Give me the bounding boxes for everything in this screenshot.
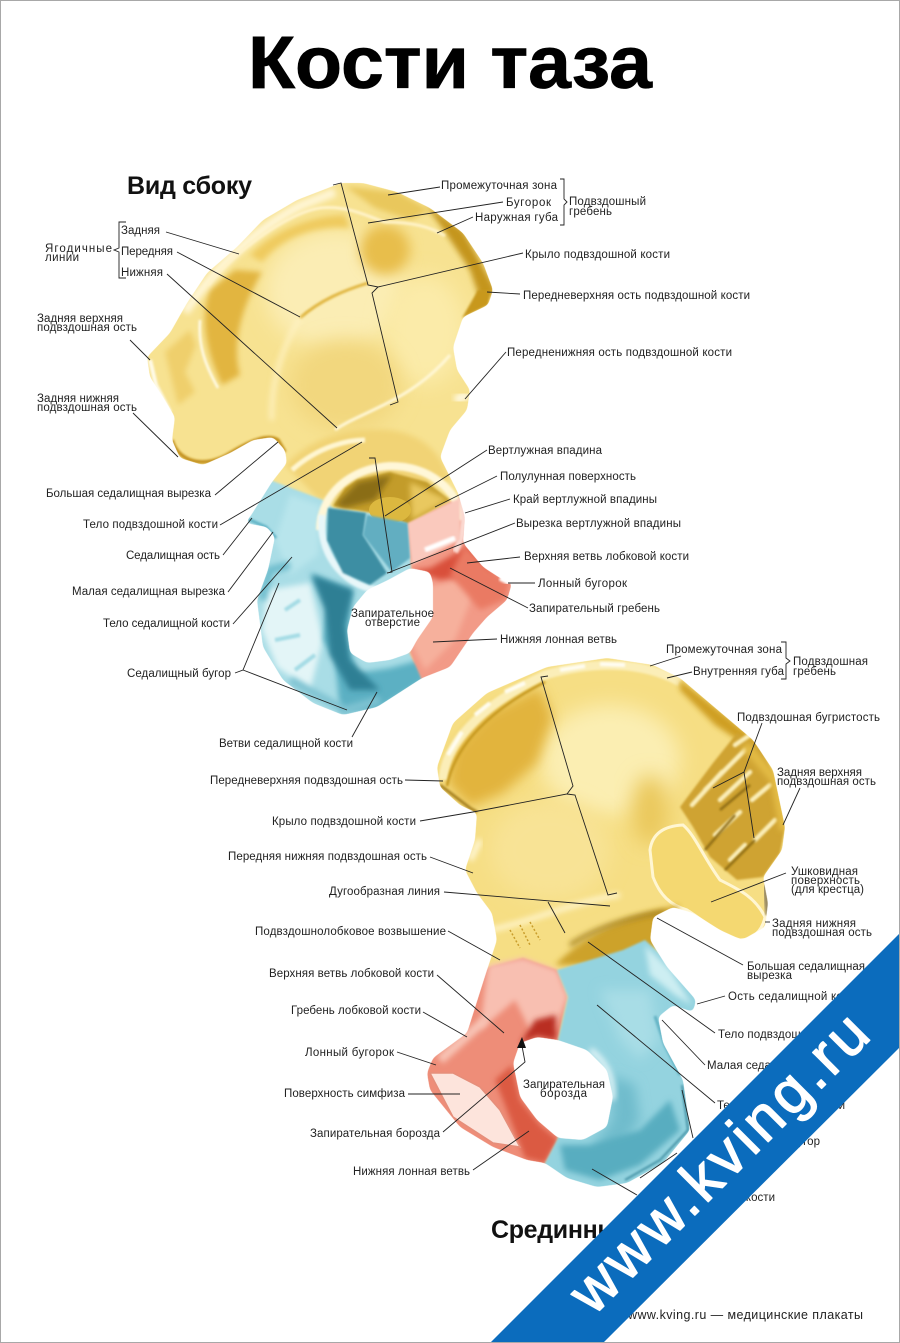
label: tubercle: Бугорок xyxy=(506,197,552,209)
label: inferior pubic ramus xyxy=(433,634,617,646)
acetabular lunate, blue part xyxy=(327,508,387,585)
watermark banner xyxy=(490,933,900,1343)
label: pubic crest xyxy=(291,1005,467,1037)
label: ischial ramus xyxy=(592,1169,775,1204)
label: intermediate zone xyxy=(650,644,783,666)
label: obturator groove inside opening: Запирательная xyxy=(523,1079,605,1091)
label: posterior superior iliac spine xyxy=(777,767,876,825)
label: pubic crest: Гребень лобковой кости xyxy=(291,1005,421,1017)
label: iliac tuberosity xyxy=(713,712,880,838)
label: intermediate zone: Промежуточная зона xyxy=(441,180,558,192)
label: acetabulum: Вертлужная впадина xyxy=(488,445,603,457)
label: superior pubic ramus: Верхняя ветвь лобковой кости xyxy=(524,551,689,563)
pubis, pink region xyxy=(408,496,511,679)
label: acetabulum xyxy=(369,445,603,573)
label: anterior inferior iliac spine: Передняя нижняя подвздошная ость xyxy=(228,851,427,863)
bracket: iliac crest xyxy=(781,642,868,679)
label: anterior superior iliac spine: Передневерхняя подвздошная ость xyxy=(210,775,403,787)
label: wing of ilium xyxy=(272,676,617,895)
label: lunate surface: Полулунная поверхность xyxy=(500,471,636,483)
label: lesser sciatic notch xyxy=(662,1020,861,1072)
label: posterior inferior iliac spine xyxy=(37,393,178,457)
label: obturator crest: Запирательный гребень xyxy=(529,603,660,615)
label: intermediate zone: Промежуточная зона xyxy=(666,644,783,656)
label: posterior superior iliac spine xyxy=(37,313,150,360)
labels: gluteal lines xyxy=(45,222,337,428)
label: body of ilium: Тело подвздошной кости xyxy=(718,1029,853,1041)
label: obturator groove inside opening xyxy=(523,1079,605,1100)
acetabular lunate, pink part xyxy=(408,498,460,565)
label: outer lip xyxy=(437,212,559,233)
label: ischial spine: Седалищная ость xyxy=(126,550,220,562)
illustration: hip bone, medial view xyxy=(427,658,785,1187)
heading: side view: Вид сбоку xyxy=(127,172,252,200)
iliac crest right dark band xyxy=(425,204,496,305)
label: body of ilium xyxy=(83,442,362,531)
label: superior pubic ramus: Верхняя ветвь лобковой кости xyxy=(269,968,434,980)
label: obturator crest xyxy=(450,568,660,615)
label: obturator foramen: Запирательное xyxy=(351,608,434,620)
label: posterior inferior iliac spine: подвздошная ость xyxy=(772,927,872,939)
label: posterior superior iliac spine: подвздошная ость xyxy=(37,322,137,334)
label: ischial tuberosity xyxy=(127,583,347,710)
label: ischial ramus: Ветви седалищной кости xyxy=(219,738,353,750)
bracket: iliac crest: Подвздошный xyxy=(569,196,646,208)
label: greater sciatic notch xyxy=(46,442,278,500)
label: ischial spine: Ость седалищной кости xyxy=(728,991,861,1003)
auricular surface xyxy=(650,825,765,940)
symphyseal surface xyxy=(430,1073,520,1147)
label: superior pubic ramus xyxy=(269,968,504,1033)
labels: gluteal lines: Нижняя xyxy=(121,267,163,279)
iliac tuberosity xyxy=(680,733,785,880)
ischial tuberosity highlight xyxy=(262,583,323,690)
illustration: hip bone, side view xyxy=(148,182,511,714)
label: inferior pubic ramus: Нижняя лонная ветвь xyxy=(500,634,617,646)
label: ischial tuberosity: Седалищный бугор xyxy=(716,1136,820,1148)
label: lesser sciatic notch: Малая седалищная вырезка xyxy=(72,586,226,598)
label: posterior inferior iliac spine: подвздошная ость xyxy=(37,402,137,414)
label: posterior superior iliac spine: подвздошная ость xyxy=(777,776,876,788)
label: obturator foramen xyxy=(351,608,434,629)
label: posterior inferior iliac spine xyxy=(765,918,872,939)
bracket: iliac crest: гребень xyxy=(569,206,612,218)
label: inferior pubic ramus xyxy=(353,1131,529,1178)
label: inner lip: Внутренняя губа xyxy=(693,666,785,678)
label: obturator groove with arrow: Запирательная борозда xyxy=(310,1128,441,1140)
iliac crest band xyxy=(443,665,680,780)
label: pubic tubercle xyxy=(305,1047,436,1065)
label: acetabular margin xyxy=(465,494,657,513)
heading: medial view: Срединный вид xyxy=(491,1216,686,1244)
label: anterior inferior iliac spine xyxy=(228,851,473,873)
labels: gluteal lines: Задняя xyxy=(121,225,160,237)
label: body of ischium: Тело седалищной кости xyxy=(103,618,230,630)
watermark banner: www.kving.ru xyxy=(554,999,882,1327)
arcuate line and ridge xyxy=(490,895,620,930)
ischium, blue region xyxy=(248,480,420,714)
label: greater sciatic notch: Большая седалищная вырезка xyxy=(46,488,212,500)
label: acetabular margin: Край вертлужной впадины xyxy=(513,494,657,506)
label: posterior superior iliac spine: Задняя верхняя xyxy=(37,313,123,325)
acetabular fossa, yellow part xyxy=(333,472,450,524)
ischial ramus dark band xyxy=(310,573,425,712)
labels: gluteal lines: Передняя xyxy=(121,246,173,258)
label: iliopubic eminence xyxy=(255,926,500,960)
label: body of ischium xyxy=(597,1005,845,1112)
pubis, pink region xyxy=(427,957,568,1164)
label: arcuate line: Дугообразная линия xyxy=(329,886,440,898)
label: pubic tubercle: Лонный бугорок xyxy=(538,578,628,590)
upper gluteal surface shading xyxy=(265,230,405,350)
label: ischial ramus: Ветви седалищной кости xyxy=(641,1192,775,1204)
labels: gluteal lines: Ягодичные xyxy=(45,243,112,255)
sciatic notch edge shadow xyxy=(172,438,285,462)
label: posterior inferior iliac spine: Задняя нижняя xyxy=(37,393,119,405)
label: intermediate zone xyxy=(388,180,558,195)
label: obturator groove with arrow xyxy=(310,1037,526,1140)
label: wing of ilium: Крыло подвздошной кости xyxy=(272,816,416,828)
label: obturator foramen: отверстие xyxy=(365,617,420,629)
bracket: iliac crest: гребень xyxy=(793,666,836,678)
labels: gluteal lines: линии xyxy=(45,252,79,264)
bracket: iliac crest xyxy=(560,179,646,225)
label: body of ischium xyxy=(103,557,292,630)
label: lesser sciatic notch xyxy=(72,532,273,598)
label: greater sciatic notch: вырезка xyxy=(747,970,793,982)
label: obturator groove inside opening: борозда xyxy=(540,1088,588,1100)
label: greater sciatic notch: Большая седалищная xyxy=(747,961,865,973)
label: anterior superior iliac spine: Передневерхняя ость подвздошной кости xyxy=(523,290,750,302)
label: body of ilium xyxy=(588,942,853,1041)
labels: lower bone xyxy=(210,642,880,1204)
ischium, blue region xyxy=(540,940,700,1200)
label: auricular surface: Ушковидная xyxy=(791,866,858,878)
label: outer lip: Наружная губа xyxy=(475,212,559,224)
iliac fossa shadow xyxy=(447,687,553,807)
label: ischial spine xyxy=(126,518,252,562)
label: anterior inferior iliac spine: Передненижняя ость подвздошной кости xyxy=(507,347,732,359)
label: inferior pubic ramus: Нижняя лонная ветвь xyxy=(353,1166,470,1178)
label: iliopubic eminence: Подвздошнолобковое возвышение xyxy=(255,926,446,938)
label: anterior inferior iliac spine xyxy=(465,347,732,399)
title: Кости таза xyxy=(248,21,653,104)
labels: upper bone xyxy=(37,179,750,750)
label: body of ischium: Тело седалищной кости xyxy=(717,1100,845,1112)
label: posterior inferior iliac spine: Задняя нижняя xyxy=(772,918,856,930)
label: lunate surface xyxy=(435,471,636,507)
footer text: www.kving.ru — медицинские плакаты xyxy=(627,1308,863,1322)
label: posterior superior iliac spine: Задняя верхняя xyxy=(777,767,862,779)
acetabulum rim xyxy=(320,466,462,530)
label: ischial ramus xyxy=(219,692,377,750)
label: iliac tuberosity: Подвздошная бугристость xyxy=(737,712,880,724)
label: symphyseal surface: Поверхность симфиза xyxy=(284,1088,406,1100)
acetabular region ridge xyxy=(285,429,450,500)
crest ridge highlights xyxy=(185,192,335,312)
label: greater sciatic notch xyxy=(657,918,865,982)
label: acetabular notch xyxy=(390,518,681,572)
label: auricular surface: поверхность xyxy=(791,875,860,887)
label: wing of ilium: Крыло подвздошной кости xyxy=(525,249,670,261)
label: ischial tuberosity: Седалищный бугор xyxy=(127,668,231,680)
label: acetabular notch: Вырезка вертлужной впадины xyxy=(516,518,681,530)
bracket: iliac crest: Подвздошная xyxy=(793,656,868,668)
label: auricular surface xyxy=(711,866,864,902)
label: wing of ilium xyxy=(333,183,670,405)
label: pubic tubercle: Лонный бугорок xyxy=(305,1047,395,1059)
label: body of ilium: Тело подвздошной кости xyxy=(83,519,218,531)
label: ischial tuberosity xyxy=(640,1090,820,1178)
label: auricular surface: (для крестца) xyxy=(791,884,864,896)
label: tubercle xyxy=(368,197,552,223)
label: lesser sciatic notch: Малая седалищная вырезка xyxy=(707,1060,861,1072)
label: arcuate line xyxy=(329,886,610,933)
